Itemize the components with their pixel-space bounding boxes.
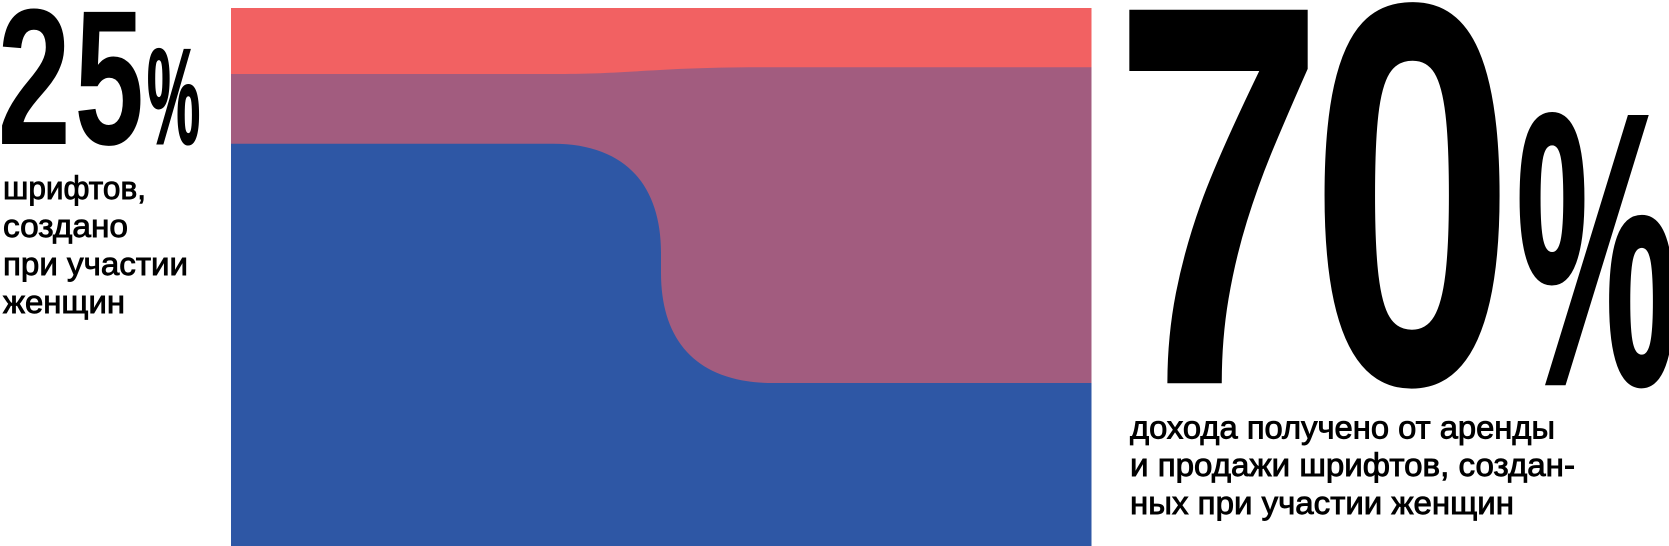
text: 25% description: создано	[3, 208, 128, 244]
area: purple middle band	[231, 67, 1092, 390]
chart: stacked area	[231, 8, 1092, 546]
text: 25% description	[3, 170, 188, 320]
text: 25% description: при участии	[3, 246, 188, 282]
text: 25% description: шрифтов,	[3, 170, 146, 206]
stat: 25% number: %	[147, 22, 200, 173]
text: 70% description	[1130, 409, 1575, 521]
area: red top band	[231, 8, 1092, 78]
area: blue bottom band	[231, 144, 1092, 546]
text: 70% description: ных при участии женщин	[1130, 485, 1514, 521]
stat: 70% number	[1113, 0, 1669, 499]
text: 25% description: женщин	[3, 284, 125, 320]
text: 70% description: дохода получено от аренды	[1130, 409, 1555, 445]
stat: 25% number	[0, 0, 200, 186]
text: 70% description: и продажи шрифтов, создан-	[1130, 447, 1575, 483]
